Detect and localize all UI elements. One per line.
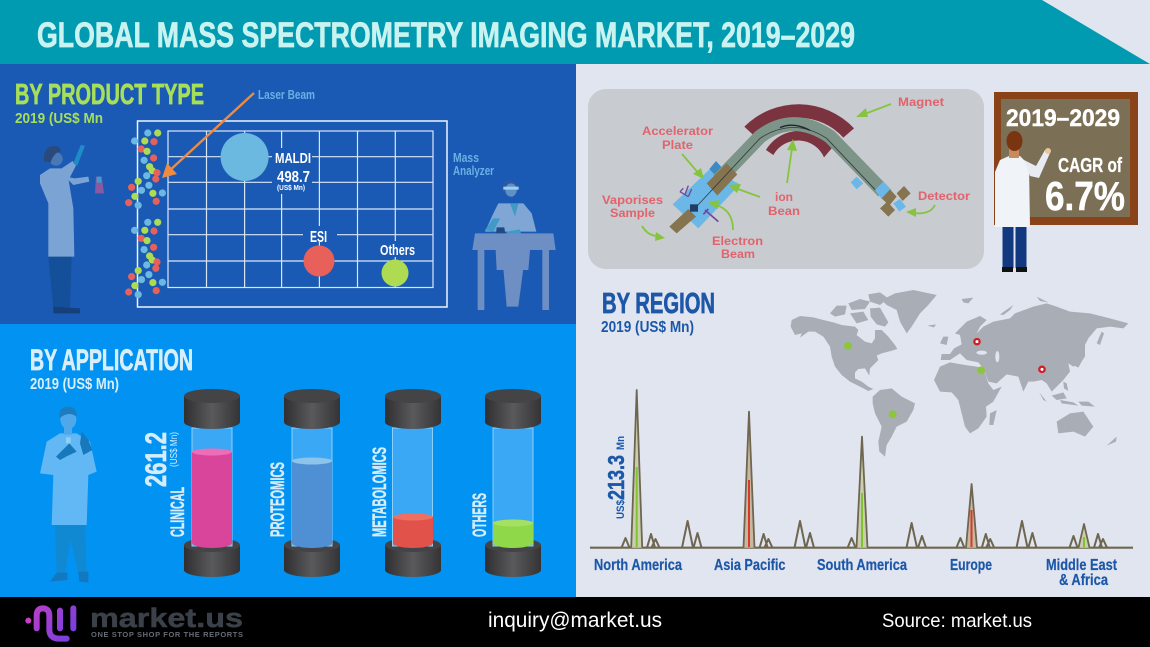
- peak: europe: [966, 484, 977, 548]
- world map: [791, 290, 1128, 457]
- labels: diagram parts: Bean: [768, 204, 800, 218]
- panel: CAGR blackboard: CAGR of: [1058, 154, 1122, 177]
- logo wordmark: ONE STOP SHOP FOR THE REPORTS: [91, 630, 243, 639]
- labels: regions: Asia Pacific: [714, 557, 786, 574]
- labels: diagram parts: Detector: [918, 189, 970, 203]
- bubble: MALDI: 498.7: [277, 169, 310, 186]
- bubble: Others: Others: [380, 242, 415, 259]
- chart: tube proteomics: [284, 389, 340, 577]
- bubble: MALDI: [221, 133, 312, 194]
- panel: by product type: [0, 64, 576, 324]
- panel: by application: [0, 324, 576, 597]
- source: Source: market.us: [882, 610, 1032, 632]
- label: mass analyzer: Mass: [453, 151, 479, 165]
- heading: by region: BY REGION: [602, 288, 715, 320]
- peak: south america: [856, 437, 868, 548]
- label: mass analyzer: [453, 151, 494, 178]
- value: north america 213.3: US$: [615, 500, 627, 519]
- labels: diagram parts: ion: [775, 190, 793, 204]
- chart: tube others: [485, 389, 541, 577]
- labels: regions: South America: [817, 557, 907, 574]
- heading: by application: BY APPLICATION: [30, 344, 193, 377]
- labels: regions: North America: [594, 557, 682, 574]
- header band: [0, 0, 1150, 64]
- labels: diagram parts: Sample: [610, 206, 655, 220]
- value: clinical 261.2: (US$ Mn): [169, 432, 180, 467]
- panel: CAGR blackboard: 6.7%: [1045, 173, 1125, 219]
- value: north america 213.3: [603, 436, 629, 519]
- logo wordmark: market.us: [90, 603, 243, 633]
- label: clinical: CLINICAL: [168, 487, 189, 537]
- labels: diagram parts: Accelerator: [642, 124, 713, 138]
- peak: middle east and africa: [1078, 524, 1090, 548]
- bubble: ESI: [303, 226, 337, 276]
- labels: regions: [594, 557, 1117, 589]
- peak: asia pacific: [744, 412, 754, 548]
- contact email: inquiry@market.us: [488, 608, 662, 632]
- value: clinical 261.2: 261.2: [140, 432, 173, 487]
- chart: tube metabolomics: [385, 389, 441, 577]
- label: proteomics: PROTEOMICS: [268, 462, 289, 537]
- label: others: OTHERS: [470, 493, 491, 537]
- heading: by product type: BY PRODUCT TYPE: [15, 79, 204, 111]
- icon: teacher: [995, 131, 1051, 272]
- bubble: Others: [378, 241, 416, 286]
- icon: market.us logo: [25, 608, 73, 639]
- labels: diagram parts: Plate: [662, 138, 693, 152]
- icon: female scientist at microscope: [472, 180, 556, 310]
- label: laser beam: Laser Beam: [258, 88, 315, 102]
- panel: spectrometer diagram: [588, 89, 984, 269]
- label: mass analyzer: Analyzer: [453, 164, 494, 178]
- labels: diagram parts: Magnet: [898, 95, 944, 109]
- labels: diagram parts: Electron: [712, 234, 763, 248]
- molecule dots upper: [125, 129, 166, 209]
- chart: tube clinical: [184, 389, 240, 577]
- value: north america 213.3: 213.3: [603, 455, 629, 500]
- molecule dots lower: [125, 219, 166, 298]
- bubble: MALDI: (US$ Mn): [277, 185, 305, 192]
- footer: [0, 597, 1150, 647]
- label: metabolomics: METABOLOMICS: [370, 447, 391, 537]
- arrow: laser beam: [162, 93, 254, 178]
- title: GLOBAL MASS SPECTROMETRY IMAGING MARKET, 2019–2029: [37, 16, 855, 55]
- labels: regions: Europe: [950, 557, 992, 574]
- diagram: mass spectrometer: [669, 104, 911, 233]
- subheading: application unit: 2019 (US$ Mn): [30, 376, 119, 393]
- labels: diagram parts: [602, 95, 970, 261]
- panel: CAGR blackboard: [994, 92, 1138, 272]
- value: north america 213.3: Mn: [615, 436, 627, 450]
- logo wordmark: [90, 603, 243, 639]
- labels: diagram parts: Vaporises: [602, 193, 663, 207]
- chart: regional peaks: [590, 390, 1133, 548]
- subheading: region unit: 2019 (US$ Mn): [601, 319, 694, 336]
- subheading: product unit: 2019 (US$ Mn: [15, 110, 103, 127]
- peak: north america: [631, 390, 642, 548]
- bubble: MALDI: MALDI: [275, 150, 311, 167]
- labels: regions: Middle East: [1046, 557, 1117, 574]
- arrows: diagram callouts: [642, 104, 935, 241]
- map markers: [844, 339, 1045, 418]
- chart frame: [138, 121, 447, 307]
- bubble: ESI: ESI: [310, 229, 327, 246]
- labels: diagram parts: Beam: [721, 247, 755, 261]
- icon: scientist with flask: [40, 407, 97, 583]
- panel: CAGR blackboard: 2019–2029: [1006, 105, 1120, 132]
- icon: male scientist: [40, 145, 104, 313]
- value: clinical 261.2: [140, 432, 180, 487]
- labels: regions: & Africa: [1059, 572, 1108, 589]
- bubble chart grid: [168, 131, 433, 288]
